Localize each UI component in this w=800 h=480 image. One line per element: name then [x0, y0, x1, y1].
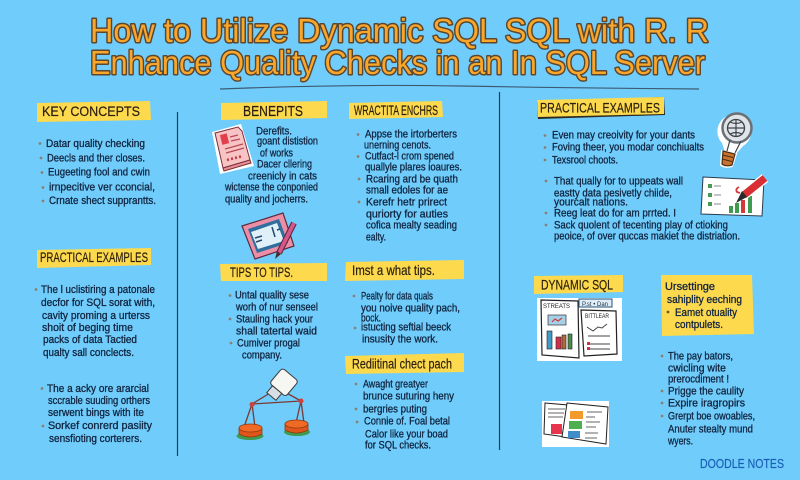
- tips list: Untal quality sese: [235, 290, 309, 302]
- rediitinal list: bergries puting: [363, 404, 427, 416]
- practical examples text: qualty sall conclects.: [43, 347, 134, 359]
- practical examples right list: eastty data pesivetly chiide,: [554, 188, 672, 200]
- wractita enchrs list: quriorty for auties: [366, 208, 448, 220]
- practical examples right list: Even may creoivity for your dants: [552, 130, 695, 142]
- list: right column notes: The pay bators,: [668, 350, 733, 362]
- key concepts list: Crnate shect supprantts.: [49, 195, 156, 207]
- imst list: istucting seftial beeck: [361, 322, 451, 334]
- rediitinal list: Awaght greatyer: [363, 378, 428, 390]
- practical examples text: cavity proming a urterss: [42, 310, 150, 322]
- heading: tips to tips: TIPS TO TIPS.: [230, 264, 293, 280]
- panel: practical examples left: [35, 248, 155, 445]
- rediitinal list: Calor like your boad: [365, 428, 448, 440]
- illustration: dashboard reports: [537, 298, 622, 361]
- tips list: Stauling hack your: [236, 314, 313, 326]
- tips list: shall tatertal waid: [236, 326, 317, 338]
- key concepts list: Deecls and ther closes.: [47, 152, 145, 164]
- key concepts list: irnpecitive ver cconcial,: [49, 182, 155, 194]
- illustration: dashboard reports: STREATS: [543, 304, 570, 310]
- practical examples text: sensfioting corterers.: [49, 433, 142, 445]
- wractita enchrs list: Appse the irtorberters: [365, 128, 457, 140]
- heading: dynamic sql: DYNAMIC SQL: [541, 276, 613, 292]
- benefits text: quality and jocherrs.: [225, 194, 308, 206]
- imst list: bock.: [361, 312, 381, 324]
- wractita enchrs list: cofica mealty seading: [366, 220, 457, 232]
- panel: benefits: [212, 101, 327, 259]
- benefits text: creenicly in cats: [248, 170, 317, 182]
- benefits text: goant dististion: [257, 136, 318, 148]
- tips list: [229, 290, 318, 362]
- tips list: worh of nur senseel: [235, 302, 318, 314]
- wractita enchrs list: Cutfact-l crom spened: [365, 150, 454, 162]
- wractita enchrs list: small edoles for ae: [366, 184, 448, 196]
- wractita enchrs list: Rcaring ard be quath: [366, 174, 458, 186]
- list: right column notes: Prigge the caulity: [668, 386, 744, 398]
- wractita enchrs list: quallyle plares ioaures.: [365, 162, 462, 174]
- benefits text: wictense the conponied: [224, 182, 318, 194]
- key concepts list: Datar quality checking: [46, 138, 145, 150]
- heading: practical examples right: PRACTICAL EXAMPLES: [540, 100, 660, 116]
- list: right column notes: Anuter stealty mund: [668, 424, 753, 436]
- practical examples right list: Sack quolent of tecenting play of ctioking: [554, 220, 728, 232]
- title: Enhance Quality Checks in an In SQL Server: [90, 44, 705, 81]
- practical examples right list: Foving theer, you modar conchiualts: [552, 142, 704, 154]
- heading: practical examples right: [537, 97, 665, 119]
- callout: yellow note: sahiplity eeching: [667, 294, 742, 306]
- heading: benefits: [221, 101, 327, 120]
- benefits text: Dacer cllering: [257, 158, 312, 170]
- callout: yellow note: [661, 275, 754, 336]
- practical examples right list: [544, 130, 740, 242]
- practical examples text: The l uclistiring a patonale: [41, 284, 155, 296]
- list: right column notes: Grerpt boe owoables,: [668, 410, 755, 422]
- icon: checklist with chart and marker: [701, 177, 765, 216]
- practical examples right list: peoice, of over quccas makiet the distriation.: [554, 230, 740, 242]
- imst list: you noive quality pach,: [361, 302, 460, 314]
- rediitinal list: [355, 378, 454, 452]
- list: right column notes: prerocdiment !: [668, 374, 729, 386]
- benefits text: of works: [260, 148, 293, 160]
- panel: wractita enchrs: [349, 101, 462, 244]
- practical examples right list: Texsrool choots.: [552, 154, 618, 166]
- practical examples text: shoit of beging time: [42, 322, 133, 334]
- tips list: Cumiver progal: [237, 338, 300, 350]
- wractita enchrs list: unerning cenots.: [364, 140, 431, 152]
- imst list: insusity the work.: [362, 334, 438, 346]
- title: [90, 12, 709, 89]
- imst list: Pealty for data quals: [361, 290, 433, 302]
- title: How to Utilize Dynamic SQL SQL with R. R: [90, 12, 709, 49]
- practical examples text: packs of data Tactied: [43, 334, 137, 346]
- heading: benefits: BENEPITS: [243, 103, 303, 120]
- panel: rediitinal chect pach: [345, 353, 464, 452]
- practical examples right list: Reeg leat do for am prrted. I: [554, 208, 676, 220]
- practical examples text: decfor for SQL sorat with,: [41, 297, 155, 309]
- heading: imst a what tips: Imst a what tips.: [352, 262, 435, 278]
- heading: practical examples: [37, 248, 151, 268]
- panel: tips to tips: [220, 263, 327, 440]
- icon: light bulb: [717, 114, 752, 167]
- illustration: open document: [542, 401, 609, 447]
- rediitinal list: Connie of. Foal betal: [364, 416, 450, 428]
- callout: yellow note: Ursettinge: [665, 281, 715, 293]
- list: right column notes: wyers.: [667, 436, 693, 448]
- practical examples right list: yourcalt nations.: [554, 196, 628, 208]
- key concepts list: [39, 138, 156, 207]
- imst list: [353, 290, 460, 346]
- tips list: company.: [242, 350, 282, 362]
- heading: wractita enchrs: WRACTITA ENCHRS: [354, 102, 438, 118]
- icon: report document: [212, 124, 254, 174]
- list: right column notes: cwicling wite: [668, 362, 726, 374]
- benefits text: Derefits.: [256, 126, 292, 138]
- practical examples text: Sorkef conrerd pasiity: [48, 420, 152, 432]
- panel: imst a what tips: [345, 260, 464, 346]
- heading: dynamic sql: [534, 275, 623, 294]
- panel: key concepts: [37, 101, 156, 207]
- panel: practical examples right: [537, 97, 765, 242]
- callout: yellow note: contpulets.: [675, 319, 723, 331]
- list: right column notes: Expire iragropirs: [668, 398, 745, 410]
- benefits text: [224, 126, 318, 206]
- callout: yellow note: Eamet otuality: [675, 307, 737, 319]
- practical examples text: serwent bings with ite: [48, 407, 144, 419]
- icon: balance scale with bottle: [236, 368, 310, 440]
- illustration: dashboard reports: P.st • Dan: [582, 302, 608, 308]
- wractita enchrs list: [357, 128, 462, 244]
- heading: rediitinal chect pach: Rediitinal chect pach: [352, 356, 452, 372]
- wractita enchrs list: ealty.: [366, 232, 386, 244]
- rediitinal list: brunce suturing heny: [363, 390, 454, 402]
- rediitinal list: for SQL checks.: [365, 440, 431, 452]
- wractita enchrs list: Kerefr hetr prirect: [366, 196, 447, 208]
- signature: doodle notes: DOODLE NOTES: [700, 457, 784, 471]
- list: right column notes: [661, 350, 755, 448]
- practical examples text: sccrable suuding orthers: [48, 395, 150, 407]
- practical examples right list: That qually for to uppeats wall: [554, 176, 683, 188]
- heading: wractita enchrs: [349, 101, 443, 119]
- practical examples text: The a acky ore ararcial: [47, 383, 149, 395]
- heading: key concepts: KEY CONCEPTS: [42, 103, 140, 119]
- key concepts list: Eugeeting fool and cwin: [48, 166, 150, 178]
- heading: practical examples: PRACTICAL EXAMPLES: [40, 249, 148, 265]
- illustration: dashboard reports: BITTLEAR: [585, 314, 610, 320]
- icon: tablet and pen: [242, 213, 294, 259]
- practical examples text: [35, 284, 155, 445]
- panel: dynamic sql: [534, 275, 623, 447]
